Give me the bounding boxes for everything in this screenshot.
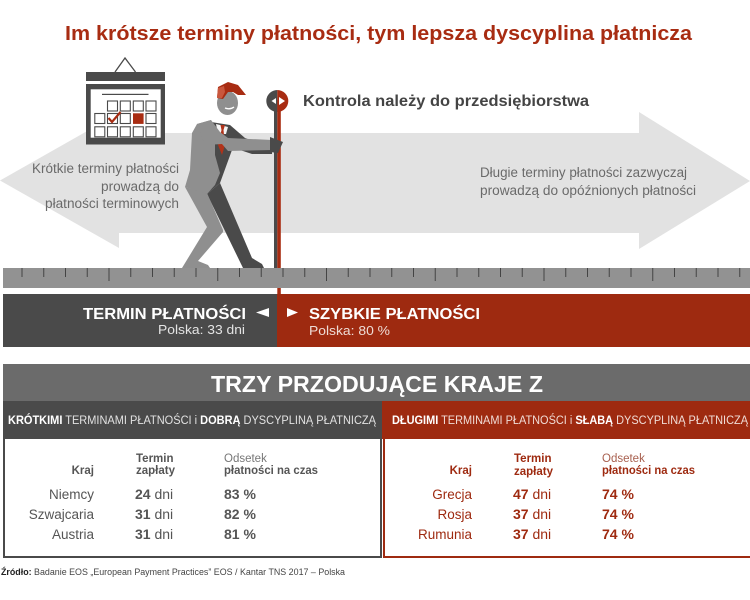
table: 83 % [224, 486, 256, 502]
table: Termin [136, 453, 174, 465]
table: 81 % [224, 526, 256, 542]
table: 31 dni [135, 526, 173, 542]
pole with round grip [266, 90, 288, 295]
source note: Źródło: Badanie EOS „European Payment Practices” EOS / Kantar TNS 2017 – Polska [1, 567, 345, 577]
text: long payment terms [480, 165, 696, 198]
head [217, 82, 246, 115]
hand [270, 137, 283, 153]
double-headed timeline arrow [0, 112, 750, 249]
table: 24 dni [135, 486, 173, 502]
table: 37 dni [513, 526, 551, 542]
table: 82 % [224, 506, 256, 522]
table: Grecja [432, 487, 472, 502]
table: 74 % [602, 486, 634, 502]
panel: leading countries, long terms [382, 401, 750, 557]
table: Kraj [72, 465, 94, 477]
text: long payment terms: Długie terminy płatności zazwyczaj [480, 165, 687, 180]
table: 37 dni [513, 506, 551, 522]
panel: fast payments [277, 294, 750, 347]
text: short payment terms: prowadzą do [101, 179, 179, 194]
businessman holding the pole [182, 120, 272, 268]
text: short payment terms: Krótkie terminy płatności [32, 161, 179, 176]
text: short payment terms [32, 161, 179, 211]
panel: payment term [3, 294, 277, 347]
panel: fast payments: Polska: 80 % [309, 323, 390, 338]
table: Odsetek [602, 453, 645, 465]
shirt [216, 124, 228, 134]
subheading: KRÓTKIMI TERMINAMI PŁATNOŚCI i DOBRĄ DYSCYPLINĄ PŁATNICZĄ [8, 414, 376, 427]
ruler [3, 268, 750, 288]
table: 31 dni [135, 506, 173, 522]
section heading: TRZY PRZODUJĄCE KRAJE Z [211, 371, 543, 397]
panel: leading countries, short terms [3, 401, 382, 557]
table: Niemcy [49, 487, 94, 502]
table [29, 453, 318, 542]
table: płatności na czas [602, 465, 695, 477]
table: zapłaty [514, 466, 554, 478]
table: 74 % [602, 506, 634, 522]
panel: payment term: Polska: 33 dni [158, 322, 245, 337]
table: zapłaty [136, 465, 176, 477]
table: Rosja [437, 507, 472, 522]
panel: payment term: TERMIN PŁATNOŚCI [83, 305, 246, 323]
heading: control: Kontrola należy do przedsiębiorstwa [303, 93, 589, 110]
table: Odsetek [224, 453, 267, 465]
panel: fast payments: SZYBKIE PŁATNOŚCI [309, 305, 480, 323]
text: short payment terms: płatności terminowych [45, 196, 179, 211]
text: long payment terms: prowadzą do opóźnionych płatności [480, 183, 696, 198]
table [418, 453, 695, 542]
front leg [182, 187, 223, 268]
title: Im krótsze terminy płatności, tym lepsza dyscyplina płatnicza [65, 22, 693, 45]
table: Termin [514, 453, 552, 465]
front arm [197, 120, 272, 151]
tie [218, 125, 225, 155]
section heading [3, 364, 750, 401]
jacket front [185, 120, 220, 194]
table: Szwajcaria [29, 507, 94, 522]
table: płatności na czas [224, 465, 318, 477]
table: 47 dni [513, 486, 551, 502]
table: 74 % [602, 526, 634, 542]
jacket back and back arm [200, 122, 272, 194]
icon: wall calendar [86, 58, 165, 144]
table: Kraj [450, 465, 472, 477]
table: Austria [52, 527, 94, 542]
back leg [207, 183, 264, 268]
table: Rumunia [418, 527, 472, 542]
subheading: DŁUGIMI TERMINAMI PŁATNOŚCI i SŁABĄ DYSCYPLINĄ PŁATNICZĄ [392, 414, 748, 427]
